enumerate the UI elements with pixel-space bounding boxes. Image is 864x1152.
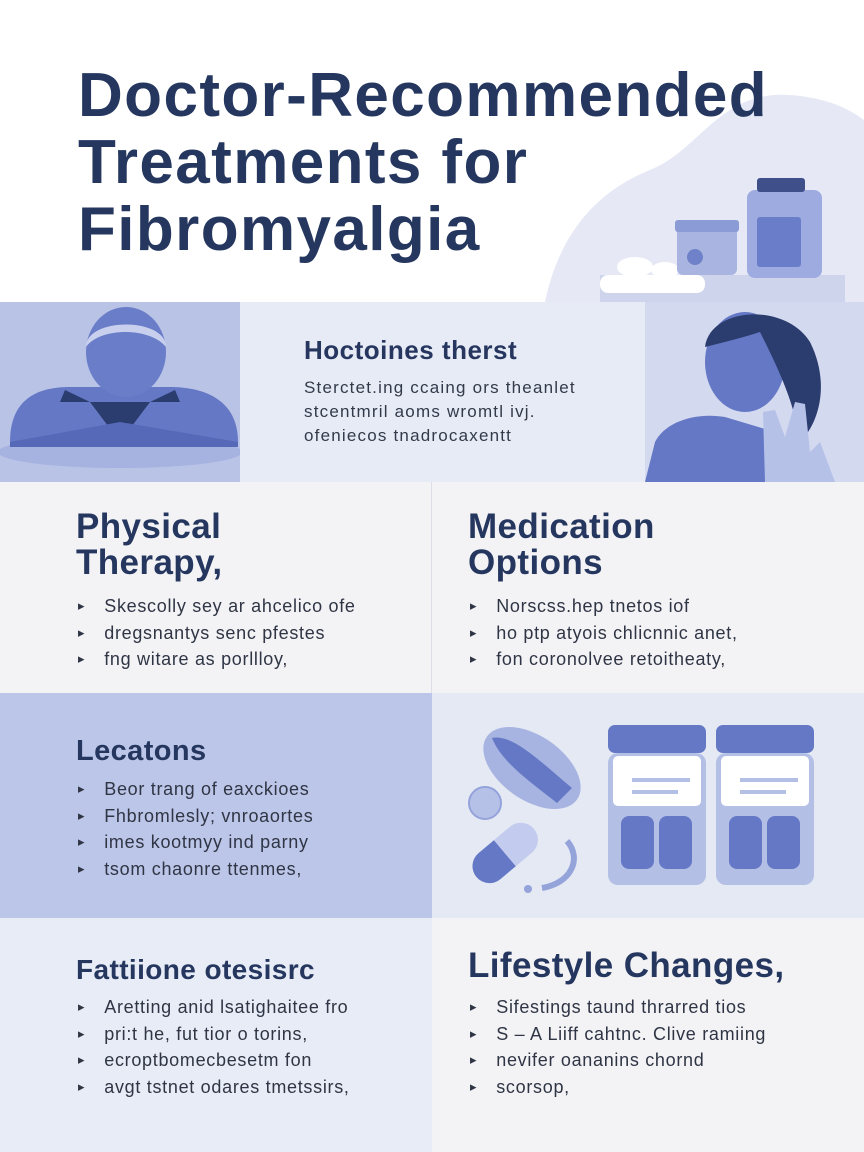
panel: fattiione: Fattiione otesisrc <box>76 954 315 985</box>
title: Fibromyalgia <box>78 195 481 264</box>
panel: row1 right illustration <box>645 302 864 482</box>
panel: lecatons: Beor trang of eaxckioes <box>104 779 309 799</box>
header background blob <box>545 94 864 302</box>
panel: physical therapy: fng witare as porllloy, <box>104 649 288 669</box>
panel: row1 middle text <box>240 302 645 482</box>
panel: lifestyle changes <box>432 918 864 1152</box>
panel: physical therapy: dregsnantys senc pfestes <box>104 622 325 642</box>
title: Treatments for <box>78 128 528 197</box>
title: Doctor-Recommended <box>78 61 768 130</box>
text block: ofeniecos tnadrocaxentt <box>304 426 512 445</box>
panel: medication options: Options <box>468 543 603 582</box>
text block: stcentmril aoms wromtl ivj. <box>304 402 536 421</box>
icon: medicine jars on shelf <box>600 178 845 302</box>
panel: fattiione <box>0 918 432 1152</box>
panel: lecatons: imes kootmyy ind parny <box>104 832 309 852</box>
text block <box>304 378 576 445</box>
panel: medication options: Medication <box>468 507 655 546</box>
panel: fattiione: Aretting anid lsatighaitee fro <box>104 997 348 1017</box>
panel: lecatons: Lecatons <box>76 735 207 767</box>
panel: physical therapy: Skescolly sey ar ahcelico ofe <box>104 596 356 616</box>
panel: medication options <box>432 482 864 693</box>
panel: lifestyle changes: Lifestyle Changes, <box>468 946 784 985</box>
panel: medication options: Norscss.hep tnetos iof <box>496 596 690 616</box>
panel: fattiione: avgt tstnet odares tmetssirs, <box>104 1076 350 1096</box>
title <box>78 61 768 264</box>
panel: physical therapy: Therapy, <box>76 543 222 582</box>
panel: row1 left illustration <box>0 302 240 482</box>
panel: lifestyle changes: scorsop, <box>496 1076 570 1096</box>
heading: Hoctoines therst: Hoctoines therst <box>304 335 517 365</box>
panel: physical therapy <box>0 482 432 693</box>
panel: physical therapy: Physical <box>76 507 221 546</box>
panel: medication options: fon coronolvee retoitheaty, <box>496 649 726 669</box>
panel: lecatons: Fhbromlesly; vnroaortes <box>104 806 313 826</box>
panel: lifestyle changes: S – A Liiff cahtnc. Clive ramiing <box>496 1024 766 1044</box>
panel: pills illustration <box>432 693 864 918</box>
panel: fattiione: pri:t he, fut tior o torins, <box>104 1024 308 1044</box>
panel: fattiione: ecroptbomecbesetm fon <box>104 1050 312 1070</box>
text block: Sterctet.ing ccaing ors theanlet <box>304 378 576 397</box>
panel: lifestyle changes: nevifer oananins chornd <box>496 1050 704 1070</box>
panel: medication options: ho ptp atyois chlicnnic anet, <box>496 622 738 642</box>
panel: lecatons <box>0 693 432 918</box>
panel: lecatons: tsom chaonre ttenmes, <box>104 858 302 878</box>
panel: lifestyle changes: Sifestings taund thrarred tios <box>496 997 746 1017</box>
